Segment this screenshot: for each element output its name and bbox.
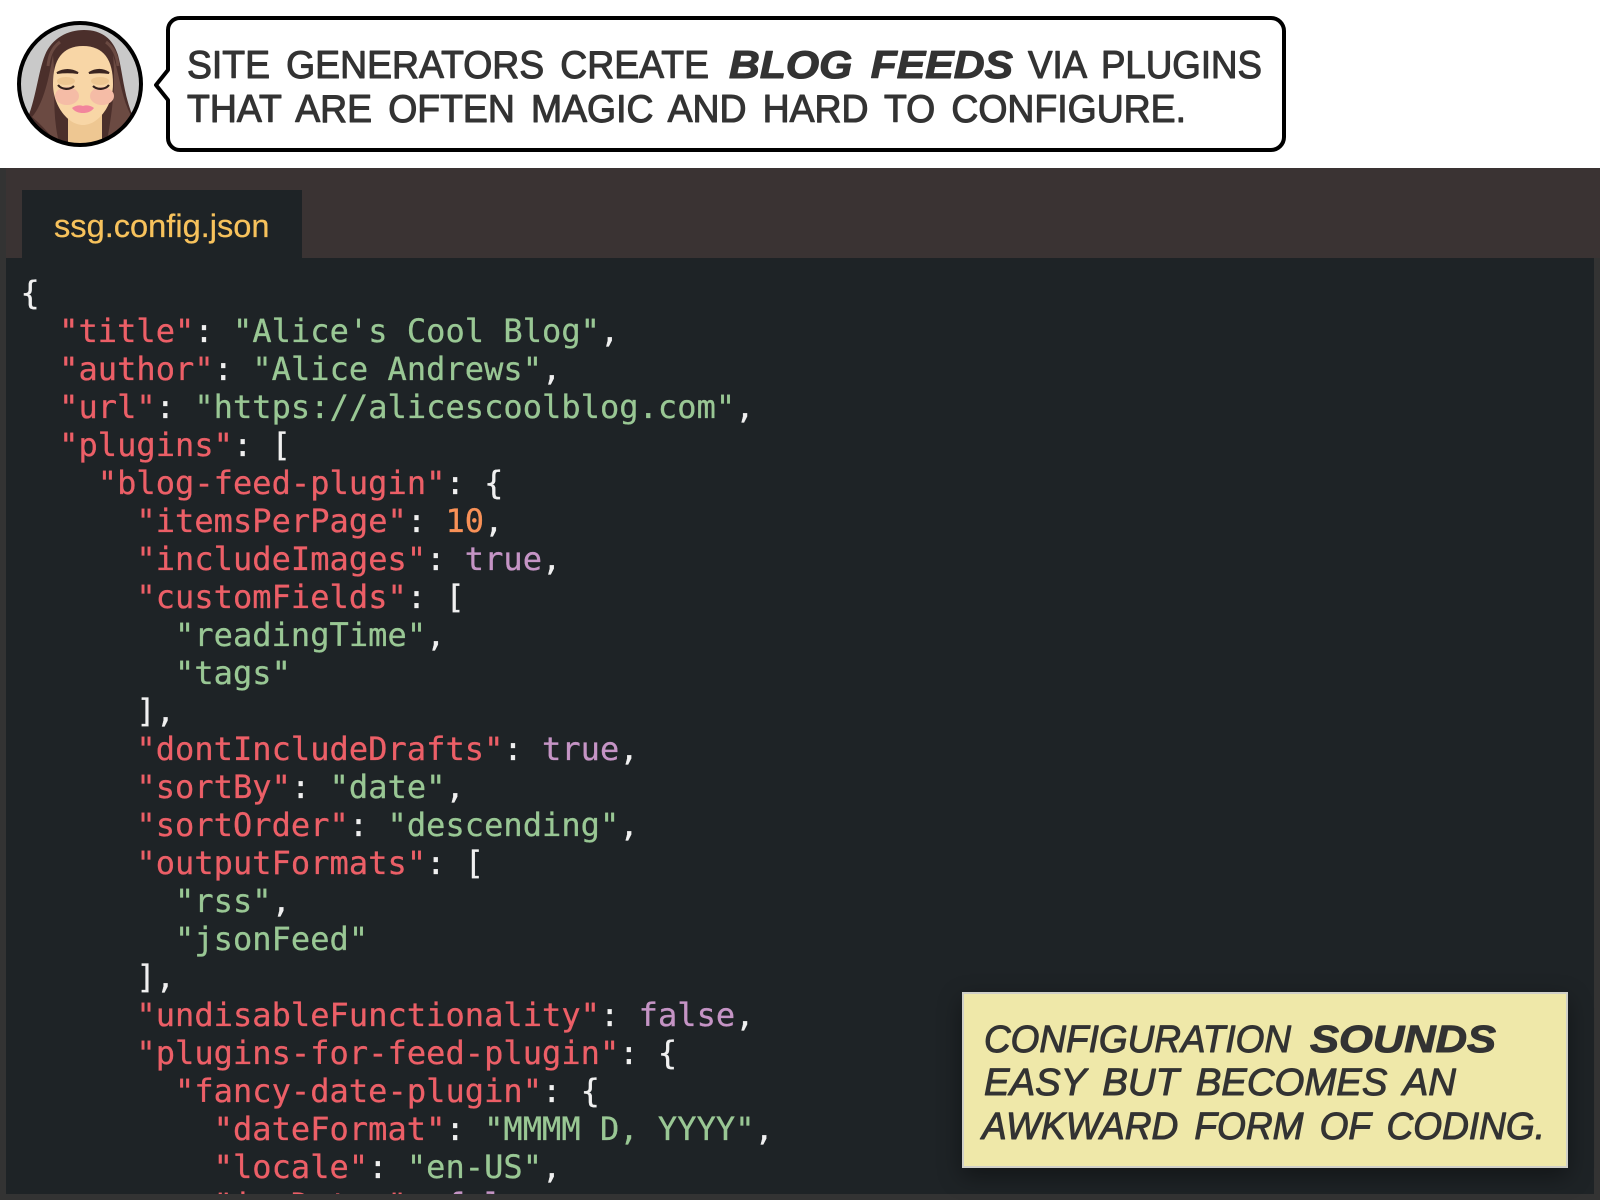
caption text: SOUNDS bbox=[1310, 1019, 1496, 1061]
bubble text: VIA PLUGINS bbox=[1028, 44, 1262, 87]
bubble text bbox=[187, 44, 1262, 131]
avatar: Alice portrait bbox=[17, 21, 143, 147]
caption text: EASY BUT BECOMES AN bbox=[984, 1062, 1457, 1104]
caption text: CONFIGURATION bbox=[984, 1019, 1292, 1061]
bubble text: THAT ARE OFTEN MAGIC AND HARD TO CONFIGURE. bbox=[187, 88, 1186, 131]
bubble outline with pointer bbox=[156, 18, 1284, 150]
file tab: ssg.config.json bbox=[22, 190, 302, 258]
speech bubble bbox=[154, 16, 1286, 152]
caption note bbox=[962, 992, 1568, 1168]
editor tab bar bbox=[6, 168, 1600, 258]
bubble text: BLOG FEEDS bbox=[729, 44, 1013, 87]
bubble text: SITE GENERATORS CREATE bbox=[187, 44, 709, 87]
caption text: AWKWARD FORM OF CODING. bbox=[980, 1106, 1545, 1148]
file tab: ssg.config.json: ssg.config.json bbox=[54, 207, 270, 244]
code panel: JSON config bbox=[6, 258, 1594, 1194]
